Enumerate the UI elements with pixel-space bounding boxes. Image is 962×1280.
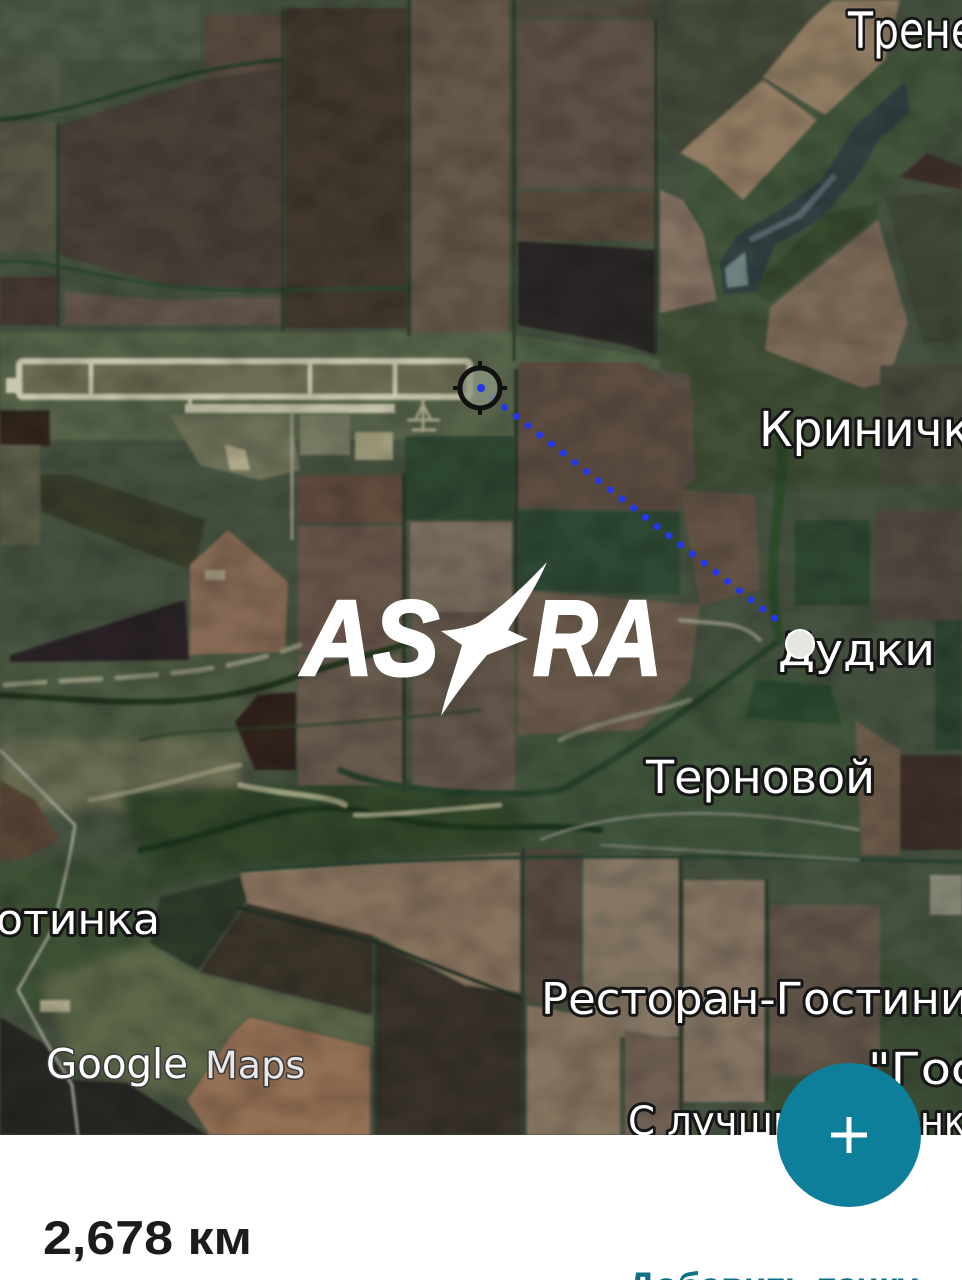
ASTRA logo: AS <box>299 578 439 698</box>
icon: start target <box>453 361 507 415</box>
route line: dotted blue <box>481 389 786 627</box>
chalk strips <box>5 620 760 815</box>
upper right fields <box>684 61 735 146</box>
east fields <box>745 680 842 725</box>
central fields <box>298 475 404 523</box>
ASTRA logo <box>299 562 662 716</box>
airfield <box>6 360 470 580</box>
distance value: 2,678 км <box>43 1211 252 1264</box>
bottom white panel <box>0 1135 962 1280</box>
icon: end point marker <box>786 630 814 658</box>
ASTRA logo: RA <box>533 578 662 698</box>
aircraft shelters and buildings <box>170 398 440 580</box>
west fields <box>40 475 205 572</box>
label: Терновой: Терновой <box>645 751 875 804</box>
label: Google: Google <box>46 1040 188 1088</box>
village roads <box>0 750 860 1135</box>
label: Ресторан-Гостини: Ресторан-Гостини <box>541 974 962 1025</box>
airfield ground <box>0 332 516 440</box>
label: Maps: Maps <box>205 1044 305 1087</box>
soft vegetation zones <box>0 308 880 1100</box>
south fields <box>240 853 520 992</box>
lake <box>720 82 910 294</box>
label: С лучши: С лучши <box>628 1099 798 1145</box>
add button <box>777 1063 921 1207</box>
label: отинка: отинка <box>0 895 160 944</box>
label: Дудки: Дудки <box>778 625 935 676</box>
runway <box>6 360 470 413</box>
